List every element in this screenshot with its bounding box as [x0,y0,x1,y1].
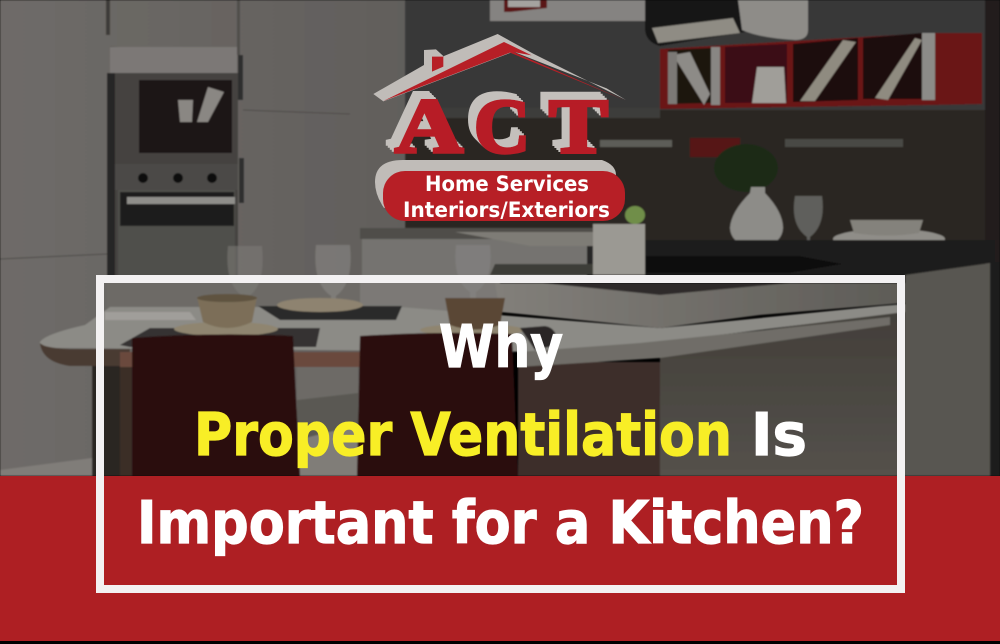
logo: badge text: Interiors/Exteriors [403,198,610,222]
chairs [132,333,518,476]
back counter and cooktop [360,206,995,279]
red band [0,476,1000,641]
logo: badge text [403,172,610,222]
plate and bowl [833,220,945,249]
glasses on table [227,245,491,322]
logo: ACT letters: A [395,83,463,169]
logo: badge [375,160,616,208]
plant [714,144,778,192]
tall oven column [106,0,244,305]
logo [373,34,626,222]
under-counter panels [0,310,905,476]
logo: ACT letters: T [549,83,608,169]
title line 3: Important for a Kitchen? [137,488,864,557]
white frame [100,279,901,589]
left wall cabinets [0,0,405,476]
title line 2: Proper Ventilation [194,400,732,469]
hood [645,0,808,46]
red shelves [660,33,982,109]
logo: roof [373,34,626,101]
dark upper cabinets [405,0,1000,280]
background: darkened kitchen photo [0,0,1000,476]
logo: ACT letters: C [474,83,530,169]
placemats and plates [105,294,557,350]
raised white ledge [495,283,905,328]
title line 1: Why [439,312,563,381]
wall behind table [107,280,362,310]
right base cabinet [905,263,990,476]
logo: ACT letters [395,83,608,169]
title [137,312,864,557]
logo: badge text: Home Services [425,172,589,196]
wine glass [794,196,823,262]
peninsula table [40,304,905,367]
vase [730,187,783,245]
title line 2 end: Is [751,400,807,469]
